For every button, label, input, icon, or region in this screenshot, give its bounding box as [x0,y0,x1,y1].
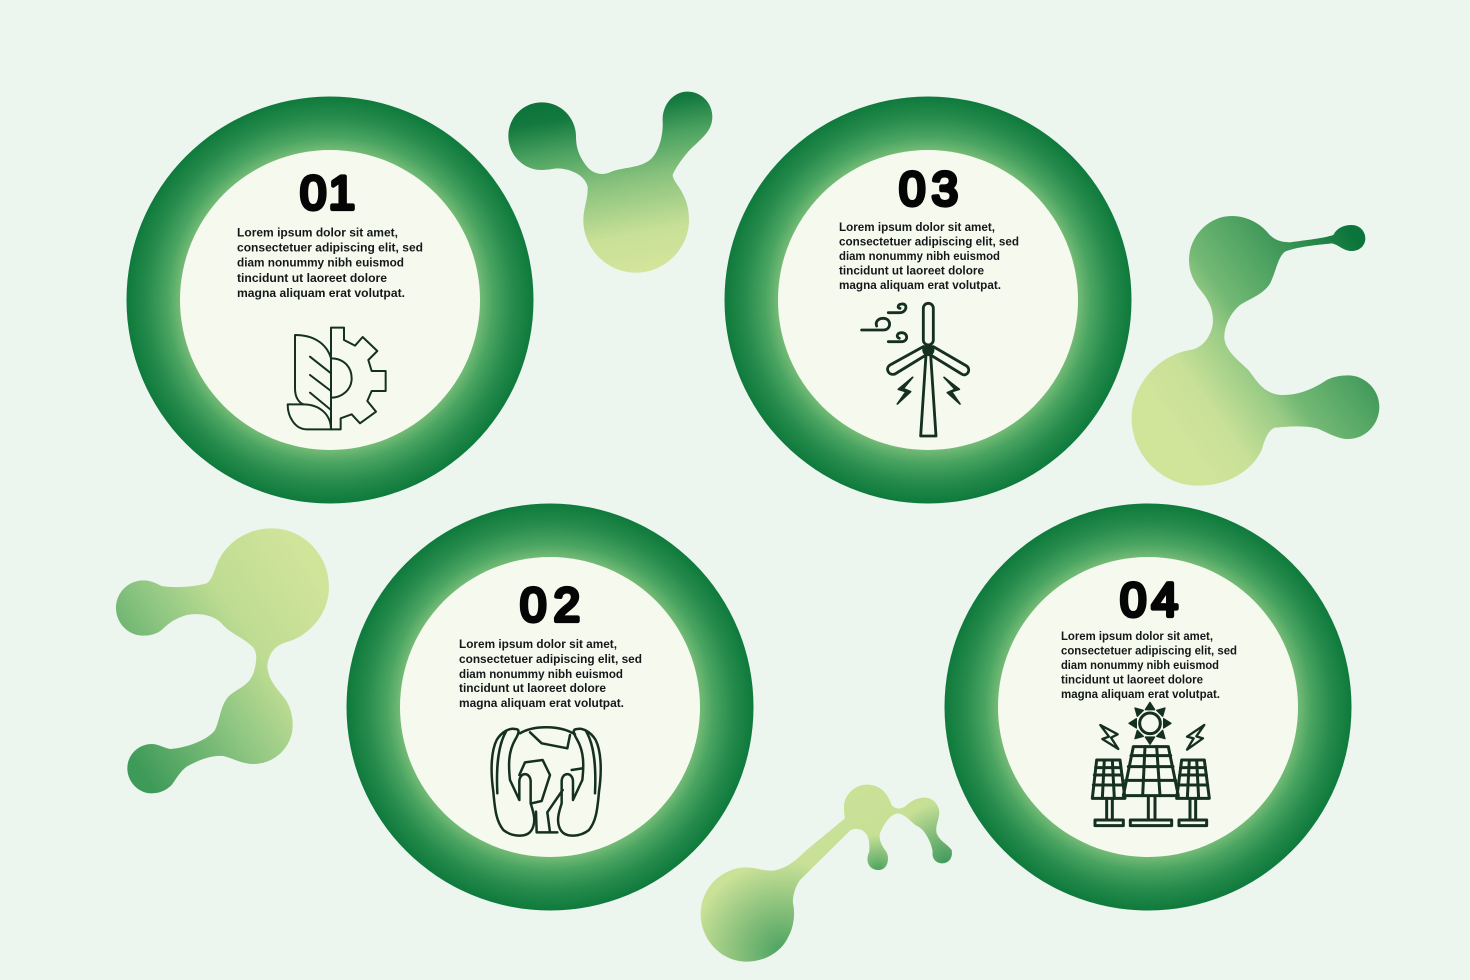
text block: diam nonummy nibh euismod [237,256,404,270]
text block: consectetuer adipiscing elit, sed [839,234,1019,248]
molecule blob: left [116,528,329,793]
text block: Lorem ipsum dolor sit amet, [459,637,617,651]
number 04: 04 [1120,574,1178,627]
text block: magna aliquam erat volutpat. [237,286,405,300]
text block: Lorem ipsum dolor sit amet, [839,220,995,234]
icon: hands holding globe [492,727,601,836]
text block: magna aliquam erat volutpat. [459,696,624,710]
molecule blob: top centre [508,92,712,273]
panel: step 03 [724,96,1132,504]
text block: consectetuer adipiscing elit, sed [459,652,642,666]
text block [459,637,642,710]
icon: leaf and gear [288,328,386,429]
inner disc [180,150,480,450]
text block: tincidunt ut laoreet dolore [839,264,984,278]
molecule blob: bottom [701,785,952,962]
text block: magna aliquam erat volutpat. [1061,688,1220,701]
molecule blob: right [1132,216,1379,486]
text block [1061,630,1237,701]
ring [724,96,1132,504]
ring [944,504,1352,910]
text block: diam nonummy nibh euismod [839,249,1000,263]
ring [126,96,534,504]
inner disc [400,557,700,857]
number 01: 01 [300,167,355,220]
panel: step 01 [126,96,534,504]
text block [839,220,1019,292]
number 03: 03 [899,163,958,216]
text block: tincidunt ut laoreet dolore [237,271,387,285]
panel: step 02 [346,504,754,910]
text block: tincidunt ut laoreet dolore [1061,674,1203,686]
text block: Lorem ipsum dolor sit amet, [1061,630,1213,643]
number 02: 02 [520,579,580,632]
icon: wind turbine [862,303,969,436]
inner disc [778,150,1078,450]
panel: step 04 [944,504,1352,910]
text block: diam nonummy nibh euismod [1061,659,1219,672]
text block [237,226,423,300]
text block: consectetuer adipiscing elit, sed [237,240,423,254]
ring [346,504,754,910]
text block: consectetuer adipiscing elit, sed [1061,644,1237,658]
text block: diam nonummy nibh euismod [459,667,623,681]
text block: magna aliquam erat volutpat. [839,278,1001,292]
inner disc [998,557,1298,857]
icon: solar panels and sun [1092,702,1209,826]
text block: tincidunt ut laoreet dolore [459,681,606,695]
text block: Lorem ipsum dolor sit amet, [237,226,398,240]
